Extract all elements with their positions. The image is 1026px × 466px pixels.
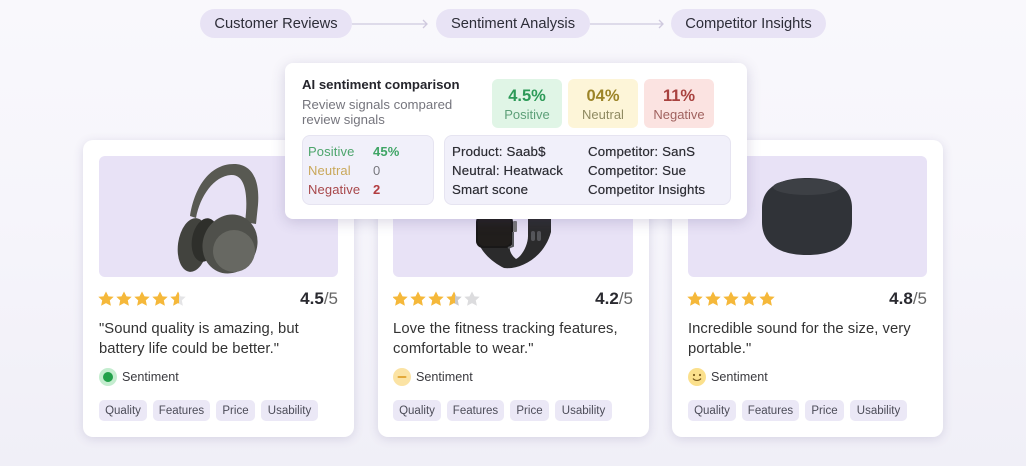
- icon: positive sentiment: [99, 368, 117, 386]
- pill: Customer Reviews: Customer Reviews: [214, 16, 338, 32]
- pill: Competitor Insights: [671, 9, 826, 38]
- subheading: Review signals compared: [302, 97, 452, 112]
- tags: [99, 400, 318, 421]
- icon: neutral sentiment: [393, 368, 411, 386]
- review quote: comfortable to wear.": [393, 340, 534, 356]
- product vs competitor box: [444, 135, 731, 205]
- stat: positive: 4.5%: [508, 87, 546, 105]
- sentiment breakdown box: Negative: [308, 182, 360, 197]
- stat: neutral: 04%: [586, 87, 620, 105]
- sentiment label: Sentiment: [416, 370, 473, 384]
- pill: Customer Reviews: [200, 9, 352, 38]
- stat: negative: 11%: [663, 87, 695, 105]
- tags: Features: [748, 405, 793, 417]
- product vs competitor box: Competitor Insights: [588, 182, 705, 197]
- sentiment breakdown box: 0: [373, 163, 380, 178]
- tags: Usability: [268, 405, 311, 417]
- tags: Quality: [694, 405, 730, 417]
- rating score: 4.5/5: [300, 289, 338, 308]
- sentiment breakdown box: 2: [373, 182, 380, 197]
- tags: Features: [159, 405, 204, 417]
- sentiment label: Sentiment: [711, 370, 768, 384]
- stat: positive: [492, 79, 562, 128]
- arrow: sentiment to competitor: [590, 20, 664, 28]
- review quote: [393, 320, 618, 356]
- tags: Price: [811, 405, 838, 417]
- rating score: 4.2/5: [595, 289, 633, 308]
- stat: positive: Positive: [504, 107, 550, 122]
- review quote: Incredible sound for the size, very: [688, 320, 911, 336]
- stat: neutral: Neutral: [582, 107, 624, 122]
- panel: smartwatch review card: [378, 140, 649, 437]
- review quote: battery life could be better.": [99, 340, 279, 356]
- star rating: 4.8: [687, 292, 775, 306]
- stat: neutral: [568, 79, 638, 128]
- icon: happy sentiment: [688, 368, 706, 386]
- review quote: Love the fitness tracking features,: [393, 320, 618, 336]
- product vs competitor box: Smart scone: [452, 182, 528, 197]
- tags: Features: [453, 405, 498, 417]
- sentiment breakdown box: Positive: [308, 144, 354, 159]
- sentiment breakdown box: 45%: [373, 144, 399, 159]
- product vs competitor box: Neutral: Heatwack: [452, 163, 563, 178]
- sentiment label: Sentiment: [122, 370, 179, 384]
- stat: negative: Negative: [653, 107, 705, 122]
- stat: negative: [644, 79, 714, 128]
- star rating: 4.2: [393, 292, 480, 306]
- review quote: portable.": [688, 340, 751, 356]
- product vs competitor box: Competitor: Sue: [588, 163, 686, 178]
- arrow: reviews to sentiment: [352, 20, 428, 28]
- product image: speaker: [688, 156, 927, 277]
- tags: Quality: [399, 405, 435, 417]
- product vs competitor box: Product: Saab$: [452, 144, 546, 159]
- tags: Usability: [857, 405, 900, 417]
- pill: Competitor Insights: Competitor Insights: [685, 16, 812, 32]
- tags: Price: [516, 405, 543, 417]
- product image: headphones: [99, 156, 338, 277]
- subheading: review signals: [302, 112, 385, 127]
- product image: smartwatch: [393, 156, 633, 277]
- heading: AI sentiment comparison: [302, 77, 460, 92]
- panel: headphones review card: [83, 140, 354, 437]
- tags: Quality: [105, 405, 141, 417]
- pill: Sentiment Analysis: Sentiment Analysis: [451, 16, 575, 32]
- product vs competitor box: Competitor: SanS: [588, 144, 695, 159]
- panel: speaker review card: [672, 140, 943, 437]
- tags: Usability: [562, 405, 605, 417]
- review quote: "Sound quality is amazing, but: [99, 320, 299, 336]
- tags: [393, 400, 612, 421]
- review quote: [99, 320, 299, 356]
- sentiment breakdown box: Neutral: [308, 163, 351, 178]
- pill: Sentiment Analysis: [436, 9, 590, 38]
- tags: [688, 400, 907, 421]
- star rating: 4.5: [98, 292, 186, 306]
- review quote: [688, 320, 911, 356]
- tags: Price: [222, 405, 249, 417]
- subheading: [302, 97, 452, 127]
- rating score: 4.8/5: [889, 289, 927, 308]
- panel: AI sentiment comparison: [285, 63, 747, 219]
- sentiment breakdown box: [302, 135, 434, 205]
